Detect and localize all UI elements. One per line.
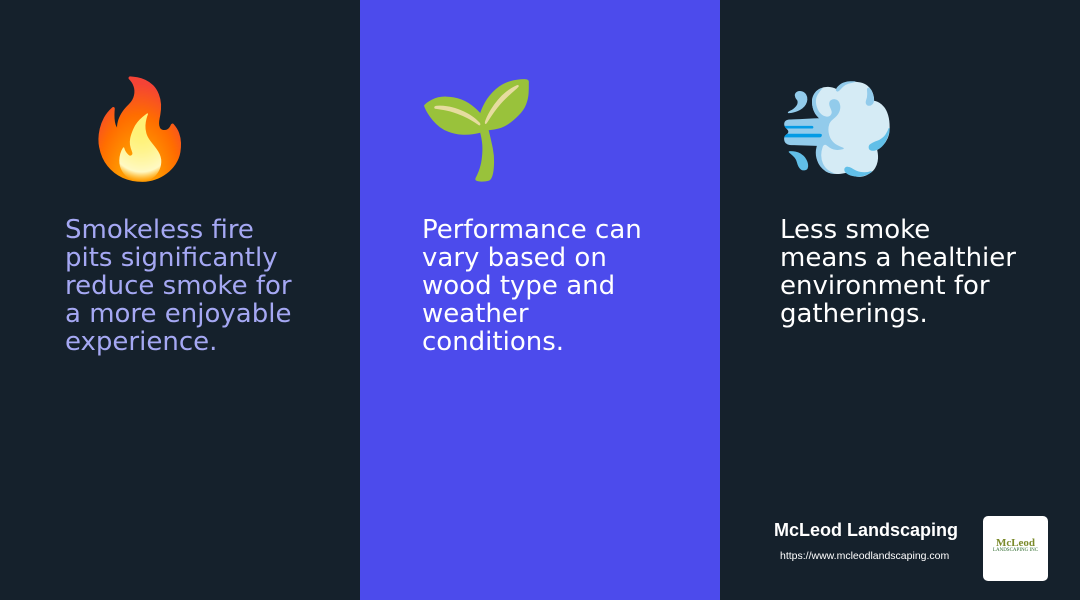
panel: seedling bbox=[360, 0, 720, 600]
icon: seedling: 🌱 bbox=[418, 74, 538, 186]
text: less smoke: environment for bbox=[780, 271, 990, 301]
logo bbox=[983, 516, 1048, 581]
brand name: McLeod Landscaping bbox=[774, 520, 958, 540]
text: performance: vary based on bbox=[422, 243, 607, 273]
brand block bbox=[774, 516, 1048, 581]
text: performance: weather bbox=[422, 299, 529, 329]
text: performance: conditions. bbox=[422, 327, 564, 357]
logo: LANDSCAPING INC bbox=[993, 548, 1038, 553]
text: smokeless: pits significantly bbox=[65, 243, 278, 273]
text: less smoke: Less smoke bbox=[780, 215, 930, 245]
text: smokeless: a more enjoyable bbox=[65, 299, 291, 329]
text: smokeless: experience. bbox=[65, 327, 217, 357]
panel: smoke bbox=[720, 0, 1080, 600]
text: less smoke: gatherings. bbox=[780, 299, 928, 329]
logo: McLeod bbox=[996, 537, 1035, 549]
text: performance: Performance can bbox=[422, 215, 642, 245]
text: smokeless: reduce smoke for bbox=[65, 271, 292, 301]
text: performance bbox=[422, 215, 642, 357]
text: less smoke bbox=[780, 215, 1016, 329]
text: less smoke: means a healthier bbox=[780, 243, 1016, 273]
icon: wind: 💨 bbox=[778, 74, 898, 186]
brand url: https://www.mcleodlandscaping.com bbox=[780, 550, 949, 562]
panel: fire bbox=[0, 0, 360, 600]
text: smokeless: Smokeless fire bbox=[65, 215, 254, 245]
text: smokeless bbox=[65, 215, 292, 357]
text: performance: wood type and bbox=[422, 271, 615, 301]
icon: fire: 🔥 bbox=[80, 74, 200, 186]
